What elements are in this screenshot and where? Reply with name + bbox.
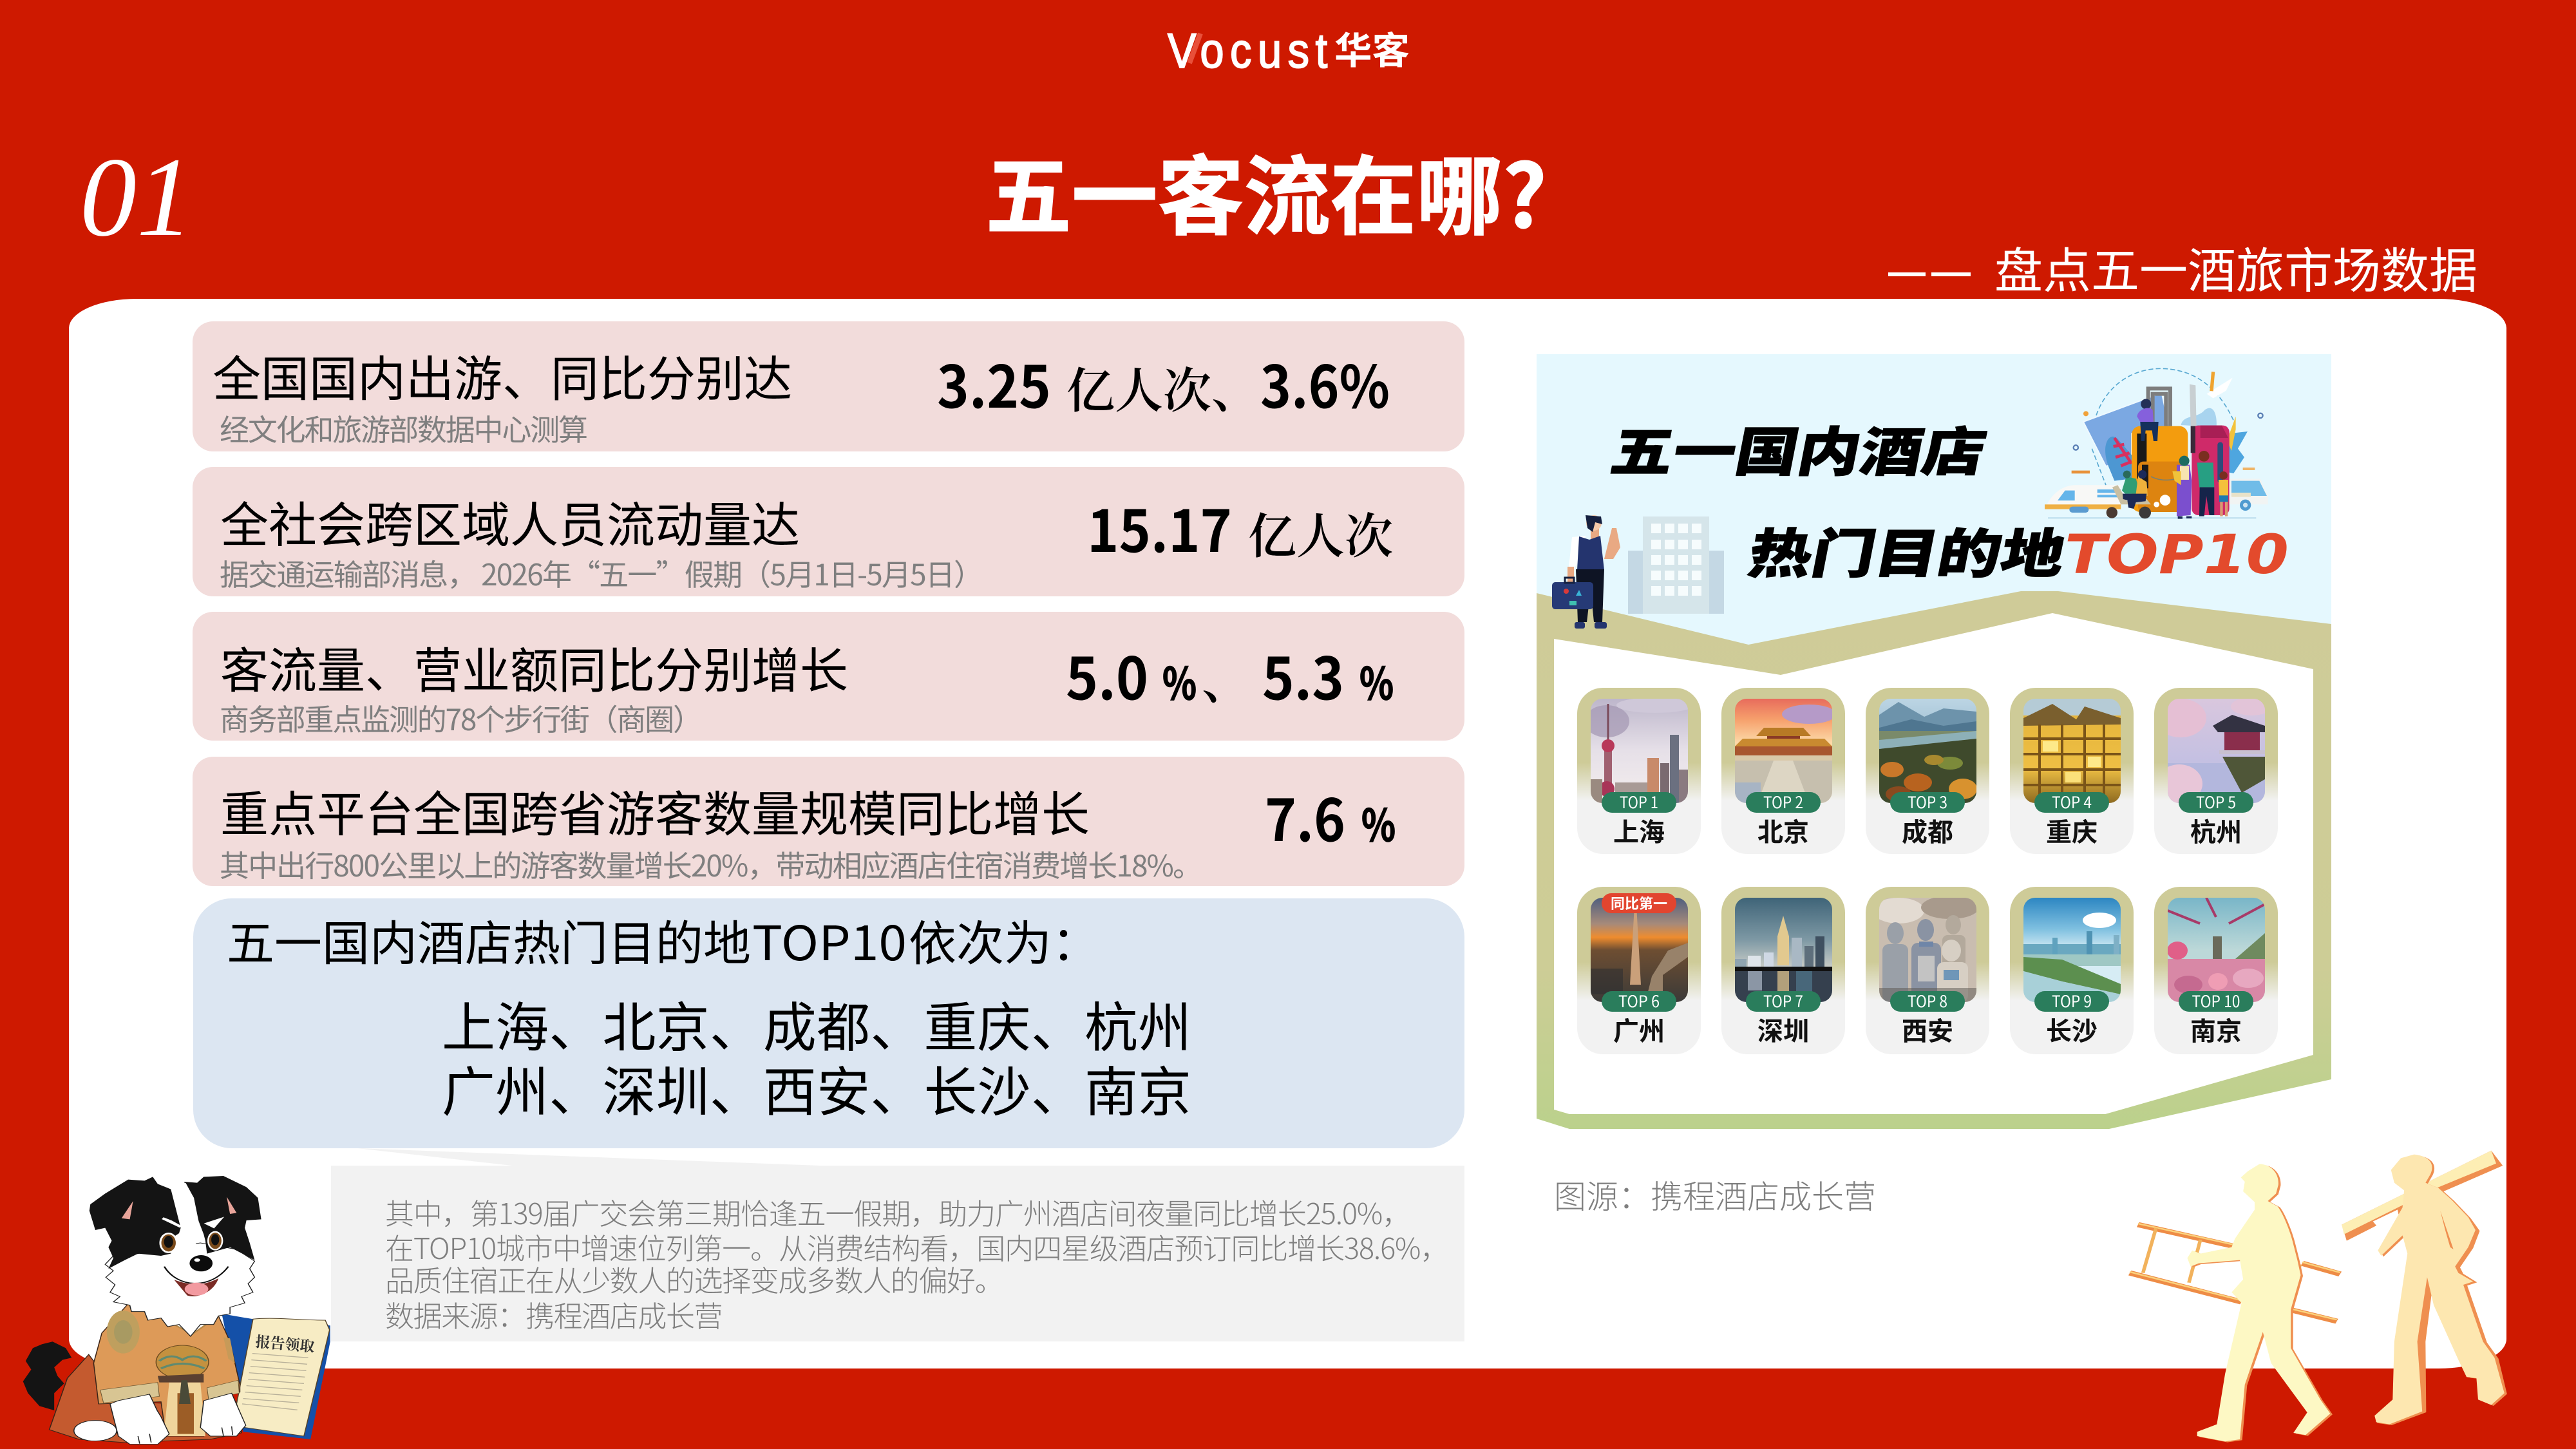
image source caption: 图源：携程酒店成长营	[1554, 1171, 1876, 1218]
tile: 广州	[1577, 887, 1701, 1054]
illustration: luggage and travellers	[2045, 368, 2268, 519]
stat card 2	[193, 467, 1464, 596]
note panel	[331, 1148, 1464, 1341]
callout: top 10 city list: 依次为：	[909, 905, 1099, 974]
tile: 西安	[1866, 887, 1989, 1054]
stat card 1: 经文化和旅游部数据中心测算	[220, 407, 588, 450]
tile: 深圳	[1721, 887, 1845, 1054]
stat card 2: 亿人次	[1248, 498, 1393, 567]
tile: 杭州: TOP 5	[2196, 790, 2236, 813]
callout: top 10 city list	[193, 898, 1464, 1148]
tile: 上海: TOP 1	[1620, 790, 1658, 813]
title: 五一客流在哪?	[985, 128, 1547, 252]
icon: traveller with suitcase	[1552, 515, 1620, 629]
stat card 1: 3.25	[937, 341, 1051, 424]
stat card 3: 客流量、营业额同比分别增长	[220, 632, 848, 702]
tile: 南京: TOP 10	[2192, 989, 2240, 1012]
stat card 4	[193, 757, 1464, 886]
callout: top 10 city list: 广州、深圳、西安、长沙、南京	[442, 1049, 1191, 1126]
logo: Vocust 华客: Vocust	[1168, 24, 1327, 79]
stat card 3: 5.3	[1262, 632, 1344, 716]
stat card 3: %	[1162, 649, 1197, 712]
stat card 1	[193, 321, 1464, 451]
mascot: dog in hanfu holding report: 报告领取	[254, 1330, 316, 1356]
tile: 北京	[1721, 688, 1845, 854]
stat card 4: %	[1361, 790, 1396, 854]
tile: 北京: TOP 2	[1763, 790, 1803, 813]
tile: 深圳: TOP 7	[1763, 989, 1803, 1012]
note panel: 其中，第139届广交会第三期恰逢五一假期，助力广州酒店间夜量同比增长25.0%，	[385, 1191, 1410, 1233]
stat card 3: %	[1359, 649, 1394, 712]
illustration: golden workers with ladder and beam	[2130, 1151, 2507, 1443]
tile: 重庆	[2010, 688, 2134, 854]
picture: hotel destinations top 10	[1537, 354, 2331, 1129]
stat card 2: 全社会跨区域人员流动量达	[220, 486, 800, 556]
tile: 广州: 同比第一	[1611, 893, 1667, 913]
tile: 杭州	[2154, 688, 2278, 854]
stat card 3: 、	[1202, 644, 1250, 713]
section number: 01	[80, 135, 193, 260]
tile: 长沙: TOP 9	[2052, 989, 2092, 1012]
tile: 西安: TOP 8	[1908, 989, 1947, 1012]
tile: 重庆: 重庆	[2046, 811, 2098, 849]
stat card 1: 全国国内出游、同比分别达	[213, 340, 792, 410]
tile: 成都: TOP 3	[1908, 790, 1947, 813]
tile: 广州: 广州	[1613, 1010, 1665, 1048]
tile: 上海: 上海	[1613, 811, 1665, 849]
tile: 广州: TOP 6	[1618, 989, 1660, 1012]
heading: 热门目的地: 热门目的地	[1743, 511, 2072, 588]
note panel: 品质住宿正在从少数人的选择变成多数人的偏好。	[385, 1258, 1003, 1300]
logo: Vocust 华客	[1168, 21, 1410, 79]
callout: top 10 city list: 五一国内酒店热门目的地	[227, 905, 751, 974]
icon: building	[1628, 516, 1724, 614]
stat card 4: 7.6	[1265, 774, 1345, 858]
stat card 2: 15.17	[1087, 485, 1232, 569]
callout: top 10 city list: 上海、北京、成都、重庆、杭州	[442, 985, 1191, 1062]
callout: top 10 city list: TOP10	[752, 905, 907, 974]
tile: 长沙	[2010, 887, 2134, 1054]
stat card 4: 重点平台全国跨省游客数量规模同比增长	[220, 775, 1090, 846]
tile: 深圳: 深圳	[1757, 1010, 1809, 1048]
logo: Vocust 华客: 华客	[1334, 21, 1410, 75]
tile: 上海	[1577, 688, 1701, 854]
panel: white content area	[69, 299, 2506, 1368]
tile: 南京	[2154, 887, 2278, 1054]
tile: 成都: 成都	[1902, 811, 1953, 849]
tile: 成都	[1866, 688, 1989, 854]
stat card 3	[193, 612, 1464, 741]
tile: 长沙: 长沙	[2046, 1010, 2098, 1048]
tile: 重庆: TOP 4	[2052, 790, 2092, 813]
note panel: 在TOP10城市中增速位列第一。从消费结构看，国内四星级酒店预订同比增长38.6%，	[385, 1226, 1448, 1267]
heading: TOP10: TOP10	[2065, 523, 2289, 586]
heading: 五一国内酒店: 五一国内酒店	[1605, 410, 1993, 486]
mascot: dog in hanfu holding report	[23, 1176, 330, 1444]
stat card 4: 其中出行800公里以上的游客数量增长20%，带动相应酒店住宿消费增长18%。	[220, 843, 1202, 886]
stat card 3: 5.0	[1066, 632, 1148, 716]
stat card 2: 据交通运输部消息， 2026年“五一”假期（5月1日-5月5日）	[220, 552, 983, 594]
stat card 1: 3.6%	[1260, 341, 1390, 424]
tile: 南京: 南京	[2190, 1010, 2242, 1048]
tile: 杭州: 杭州	[2190, 811, 2242, 849]
tile: 西安: 西安	[1902, 1010, 1953, 1048]
subtitle: 盘点五一酒旅市场数据	[1994, 232, 2477, 302]
stat card 1: 亿人次、	[1066, 353, 1260, 422]
note panel: 数据来源：携程酒店成长营	[385, 1293, 722, 1335]
tile: 北京: 北京	[1757, 811, 1809, 849]
stat card 3: 商务部重点监测的78个步行街（商圈）	[220, 697, 703, 739]
